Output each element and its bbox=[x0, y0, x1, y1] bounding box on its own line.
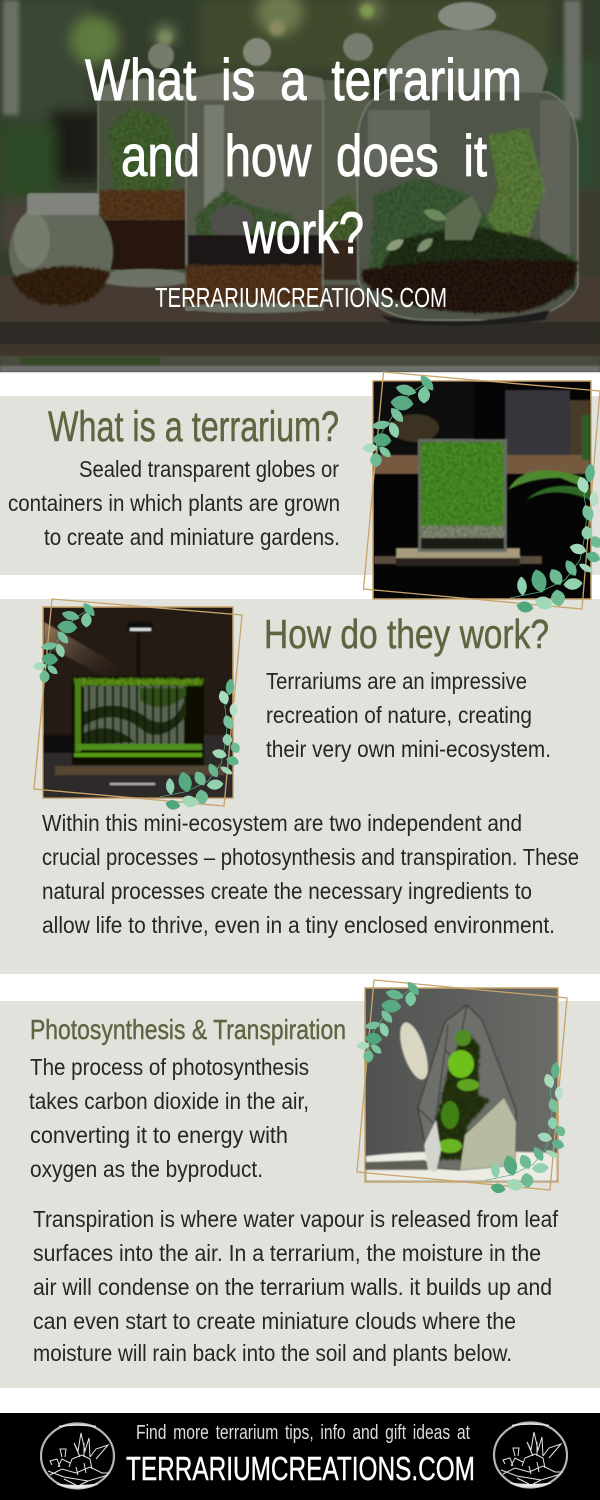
text block: two processes: Within this mini-ecosystem are two independent and bbox=[42, 810, 522, 836]
text block: two processes: natural processes create the necessary ingredients to bbox=[42, 878, 532, 904]
icon: terrarium bowl left bbox=[41, 1424, 114, 1488]
panel: what is a terrarium bbox=[0, 396, 600, 575]
text block: definition bbox=[8, 456, 340, 550]
title: and how does it bbox=[121, 124, 487, 189]
hero photo: glass jars on a wooden table bbox=[0, 0, 600, 372]
heading: what is a terrarium: What is a terrarium? bbox=[48, 403, 339, 451]
text block: definition: Sealed transparent globes or bbox=[79, 456, 339, 482]
icon: terrarium bowl right bbox=[494, 1422, 567, 1488]
small round jar bbox=[9, 193, 113, 306]
text block: photosynthesis bbox=[29, 1054, 309, 1182]
leaf sprig top bbox=[362, 373, 437, 468]
text block: transpiration bbox=[33, 1206, 558, 1366]
text block: photosynthesis: oxygen as the byproduct. bbox=[30, 1156, 263, 1182]
leaf sprig bottom bbox=[485, 1062, 567, 1194]
text block: photosynthesis: converting it to energy with bbox=[30, 1122, 288, 1148]
gold frame bbox=[364, 372, 600, 609]
text block: photosynthesis: The process of photosynthesis bbox=[30, 1054, 309, 1080]
text block: mini-ecosystem: Terrariums are an impressive bbox=[266, 668, 527, 694]
gold frame bbox=[34, 599, 242, 806]
text block: mini-ecosystem: recreation of nature, creating bbox=[266, 702, 532, 728]
title bbox=[85, 48, 522, 266]
text block: two processes: allow life to thrive, even in a tiny enclosed environment. bbox=[42, 912, 555, 938]
text block: transpiration: moisture will rain back into the soil and plants below. bbox=[33, 1340, 512, 1366]
large jar with ferns bbox=[357, 2, 578, 326]
gold frame bbox=[357, 980, 567, 1190]
leaf sprig bottom bbox=[160, 678, 242, 811]
text block: mini-ecosystem: their very own mini-ecosystem. bbox=[266, 736, 551, 762]
footer tagline: Find more terrarium tips, info and gift ideas at bbox=[136, 1422, 470, 1444]
footer website: TERRARIUMCREATIONS.COM bbox=[126, 1450, 475, 1487]
text block: transpiration: surfaces into the air. In a terrarium, the moisture in the bbox=[33, 1240, 541, 1266]
back left jar bbox=[97, 43, 193, 287]
leaf sprig top bbox=[33, 601, 97, 683]
panel: how do they work bbox=[0, 599, 600, 974]
text block: mini-ecosystem bbox=[266, 668, 551, 762]
text block: definition: containers in which plants are grown bbox=[8, 490, 340, 516]
title: work? bbox=[242, 201, 364, 266]
back right jar bbox=[322, 33, 373, 285]
heading: photosynthesis and transpiration: Photosynthesis & Transpiration bbox=[30, 1014, 346, 1045]
text block: transpiration: can even start to create miniature clouds where the bbox=[33, 1308, 516, 1334]
text block: photosynthesis: takes carbon dioxide in the air, bbox=[29, 1088, 309, 1114]
footer band bbox=[0, 1413, 600, 1500]
text block: definition: to create and miniature gardens. bbox=[44, 524, 340, 550]
panel: photosynthesis and transpiration bbox=[0, 1001, 600, 1388]
leaf sprig top bbox=[356, 980, 422, 1063]
photo card: tall glass terrarium bbox=[362, 372, 600, 614]
text block: two processes bbox=[42, 810, 579, 938]
middle jar bbox=[186, 38, 326, 313]
leaf sprig bottom bbox=[510, 463, 600, 614]
subtitle: website: TERRARIUMCREATIONS.COM bbox=[155, 282, 447, 313]
photo card: geometric glass terrarium bbox=[356, 980, 567, 1194]
text block: transpiration: air will condense on the terrarium walls. it builds up and bbox=[33, 1274, 552, 1300]
photo card: moss wall terrarium bbox=[33, 599, 242, 811]
